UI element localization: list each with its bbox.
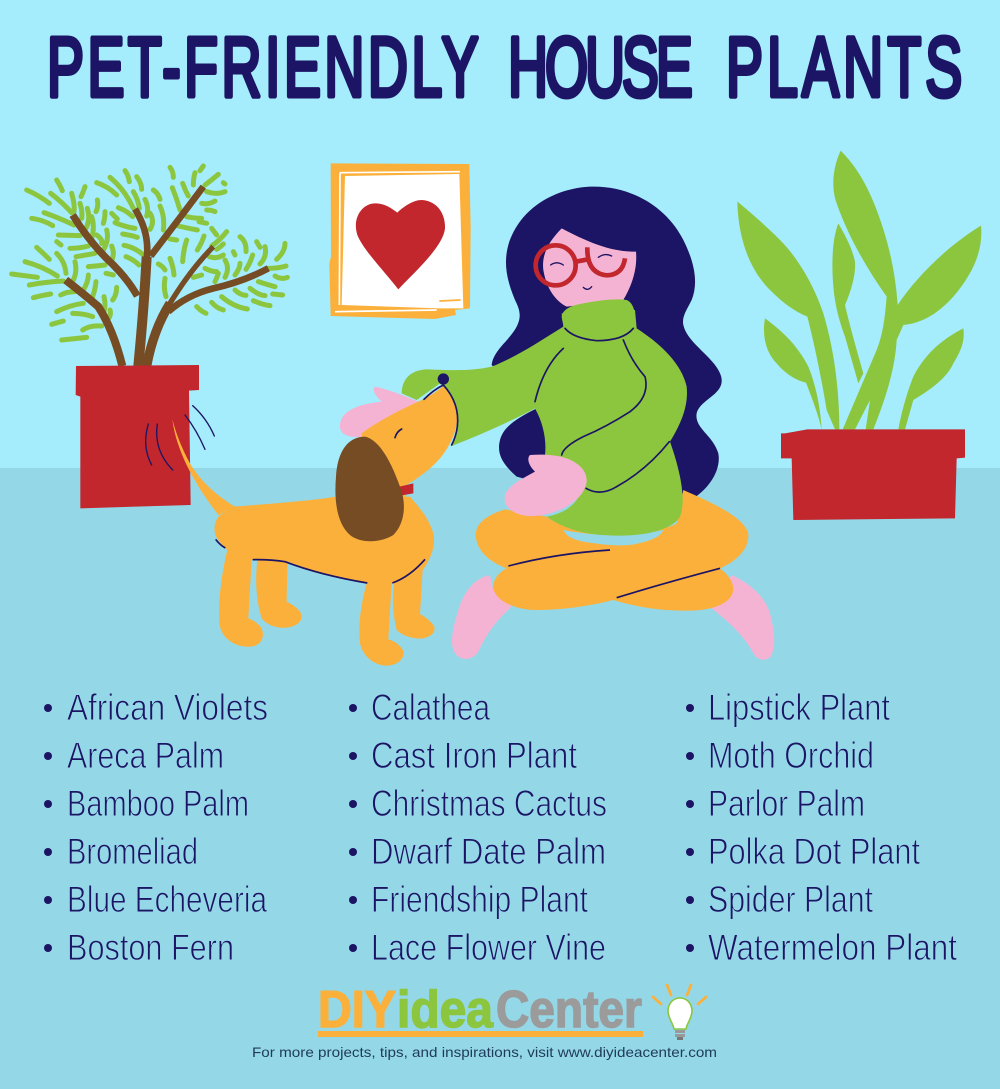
hand petting dog (340, 387, 418, 437)
tree branches (66, 187, 268, 366)
plant list: column 2 (349, 687, 607, 968)
logo (318, 981, 643, 1039)
long hair (492, 187, 722, 498)
plant list: column 1 (44, 687, 268, 968)
title: PLANTS (726, 22, 962, 115)
logo: idea (397, 981, 494, 1039)
gap between sweater and legs (563, 530, 663, 545)
turtleneck collar (562, 299, 635, 340)
dog nose (438, 373, 449, 385)
plant list: column 3: Parlor Palm (708, 783, 865, 824)
plant list: column 1: African Violets (67, 687, 268, 728)
tail wag lines (146, 406, 214, 470)
dog head (362, 386, 457, 513)
leg creases (508, 550, 720, 598)
glasses (536, 245, 625, 285)
plant list: column 3: Moth Orchid (708, 735, 874, 776)
dog collar (399, 483, 413, 495)
plant leaves (737, 151, 981, 429)
red pot (781, 429, 965, 520)
plant list: column 2: Friendship Plant (371, 879, 589, 920)
dog tail (172, 419, 235, 515)
left potted tree (12, 166, 287, 508)
plant list: column 2: Calathea (371, 687, 490, 728)
background floor (0, 468, 1000, 1089)
heart (356, 200, 445, 289)
footer tagline: For more projects, tips, and inspirations, visit www.diyideacenter.com (252, 1044, 717, 1060)
dog body and legs (214, 497, 435, 666)
plant list: column 3 (686, 687, 958, 968)
plant list: column 1: Areca Palm (67, 735, 224, 776)
frame border (329, 163, 471, 319)
plant list: column 1: Boston Fern (67, 927, 234, 968)
green sweater (402, 310, 687, 536)
plant list: column 2: Cast Iron Plant (371, 735, 578, 776)
closed eyes and smile (551, 255, 612, 289)
dog belly line (216, 539, 425, 583)
picture frame with heart (329, 163, 471, 319)
woman (402, 187, 774, 660)
dog (146, 373, 458, 666)
background wall (0, 0, 1000, 469)
dog ear (335, 437, 404, 541)
frame mat (342, 174, 463, 308)
face (543, 228, 636, 307)
plant list: column 2: Lace Flower Vine (371, 927, 606, 968)
crossed legs (476, 490, 748, 611)
plant list: column 3: Spider Plant (708, 879, 874, 920)
plant list: column 2: Christmas Cactus (371, 783, 607, 824)
right potted plant (737, 151, 981, 520)
terracotta pot (76, 365, 199, 508)
plant list: column 1: Bamboo Palm (67, 783, 249, 824)
icon: light bulb (653, 985, 706, 1040)
title (47, 22, 962, 115)
right foot (712, 575, 774, 660)
plant list: column 1: Bromeliad (67, 831, 198, 872)
plant list: column 3: Polka Dot Plant (708, 831, 921, 872)
title: HOUSE (508, 22, 693, 115)
sweater fold lines (535, 328, 669, 492)
dog snout line and eye (395, 385, 458, 445)
plant list: column 1: Blue Echeveria (67, 879, 267, 920)
hand on lap (505, 455, 587, 516)
left foot (452, 575, 512, 659)
plant list: column 2: Dwarf Date Palm (371, 831, 606, 872)
title: PET-FRIENDLY (47, 22, 479, 115)
plant list: column 3: Lipstick Plant (708, 687, 891, 728)
plant list: column 3: Watermelon Plant (708, 927, 958, 968)
tree leaves (12, 166, 287, 340)
logo: Center (496, 981, 642, 1039)
logo: DIY (318, 981, 396, 1039)
